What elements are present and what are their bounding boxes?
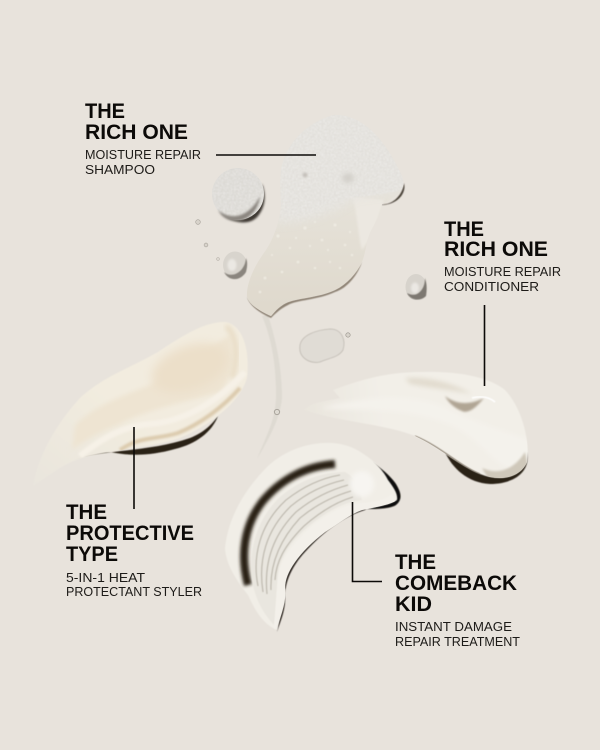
droplets	[196, 220, 427, 415]
product name: conditioner: CONDITIONER	[444, 280, 539, 294]
product name: heat protectant: PROTECTANT STYLER	[66, 585, 202, 599]
heading: the comeback kid: KID	[395, 593, 432, 616]
heading: the comeback kid: THE	[395, 551, 436, 574]
leader line: comeback kid	[352, 502, 382, 582]
callout: conditioner	[444, 218, 561, 386]
product name: shampoo: MOISTURE REPAIR	[85, 148, 201, 162]
heading: the comeback kid: COMEBACK	[395, 572, 517, 595]
heading: the protective type	[66, 501, 194, 566]
product name: treatment: REPAIR TREATMENT	[395, 635, 520, 649]
heading: the rich one	[85, 100, 188, 144]
leader line: protective type	[133, 427, 135, 509]
heading: the comeback kid	[395, 551, 517, 616]
product name: shampoo	[85, 148, 201, 177]
heading: the rich one: THE	[444, 218, 484, 241]
infographic canvas	[66, 104, 560, 646]
callout: comeback kid	[352, 502, 520, 649]
swatch: conditioner	[327, 372, 528, 485]
swatch: protective type	[76, 322, 247, 458]
callout: shampoo	[85, 100, 316, 177]
product name: conditioner	[444, 265, 561, 294]
heading: the protective type: THE	[66, 501, 107, 524]
product name: conditioner: MOISTURE REPAIR	[444, 265, 561, 279]
heading: the rich one: THE	[85, 100, 125, 123]
product name: heat protectant: 5-IN-1 HEAT	[66, 571, 145, 585]
callout: protective type	[66, 427, 202, 599]
heading: the protective type: PROTECTIVE	[66, 522, 194, 545]
heading: the rich one	[444, 218, 548, 261]
product name: treatment	[395, 620, 520, 649]
product name: treatment: INSTANT DAMAGE	[395, 620, 512, 634]
swatch: foam blob	[212, 168, 265, 222]
swatch: comeback kid	[225, 443, 400, 632]
heading: the rich one: RICH ONE	[444, 238, 548, 261]
leader line: shampoo	[216, 154, 316, 156]
heading: the protective type: TYPE	[66, 543, 118, 566]
product name: heat protectant	[66, 571, 202, 599]
heading: the rich one: RICH ONE	[85, 121, 188, 144]
leader line: conditioner	[484, 305, 486, 386]
product name: shampoo: SHAMPOO	[85, 163, 155, 177]
swatch: shampoo foam and gel	[247, 128, 406, 450]
